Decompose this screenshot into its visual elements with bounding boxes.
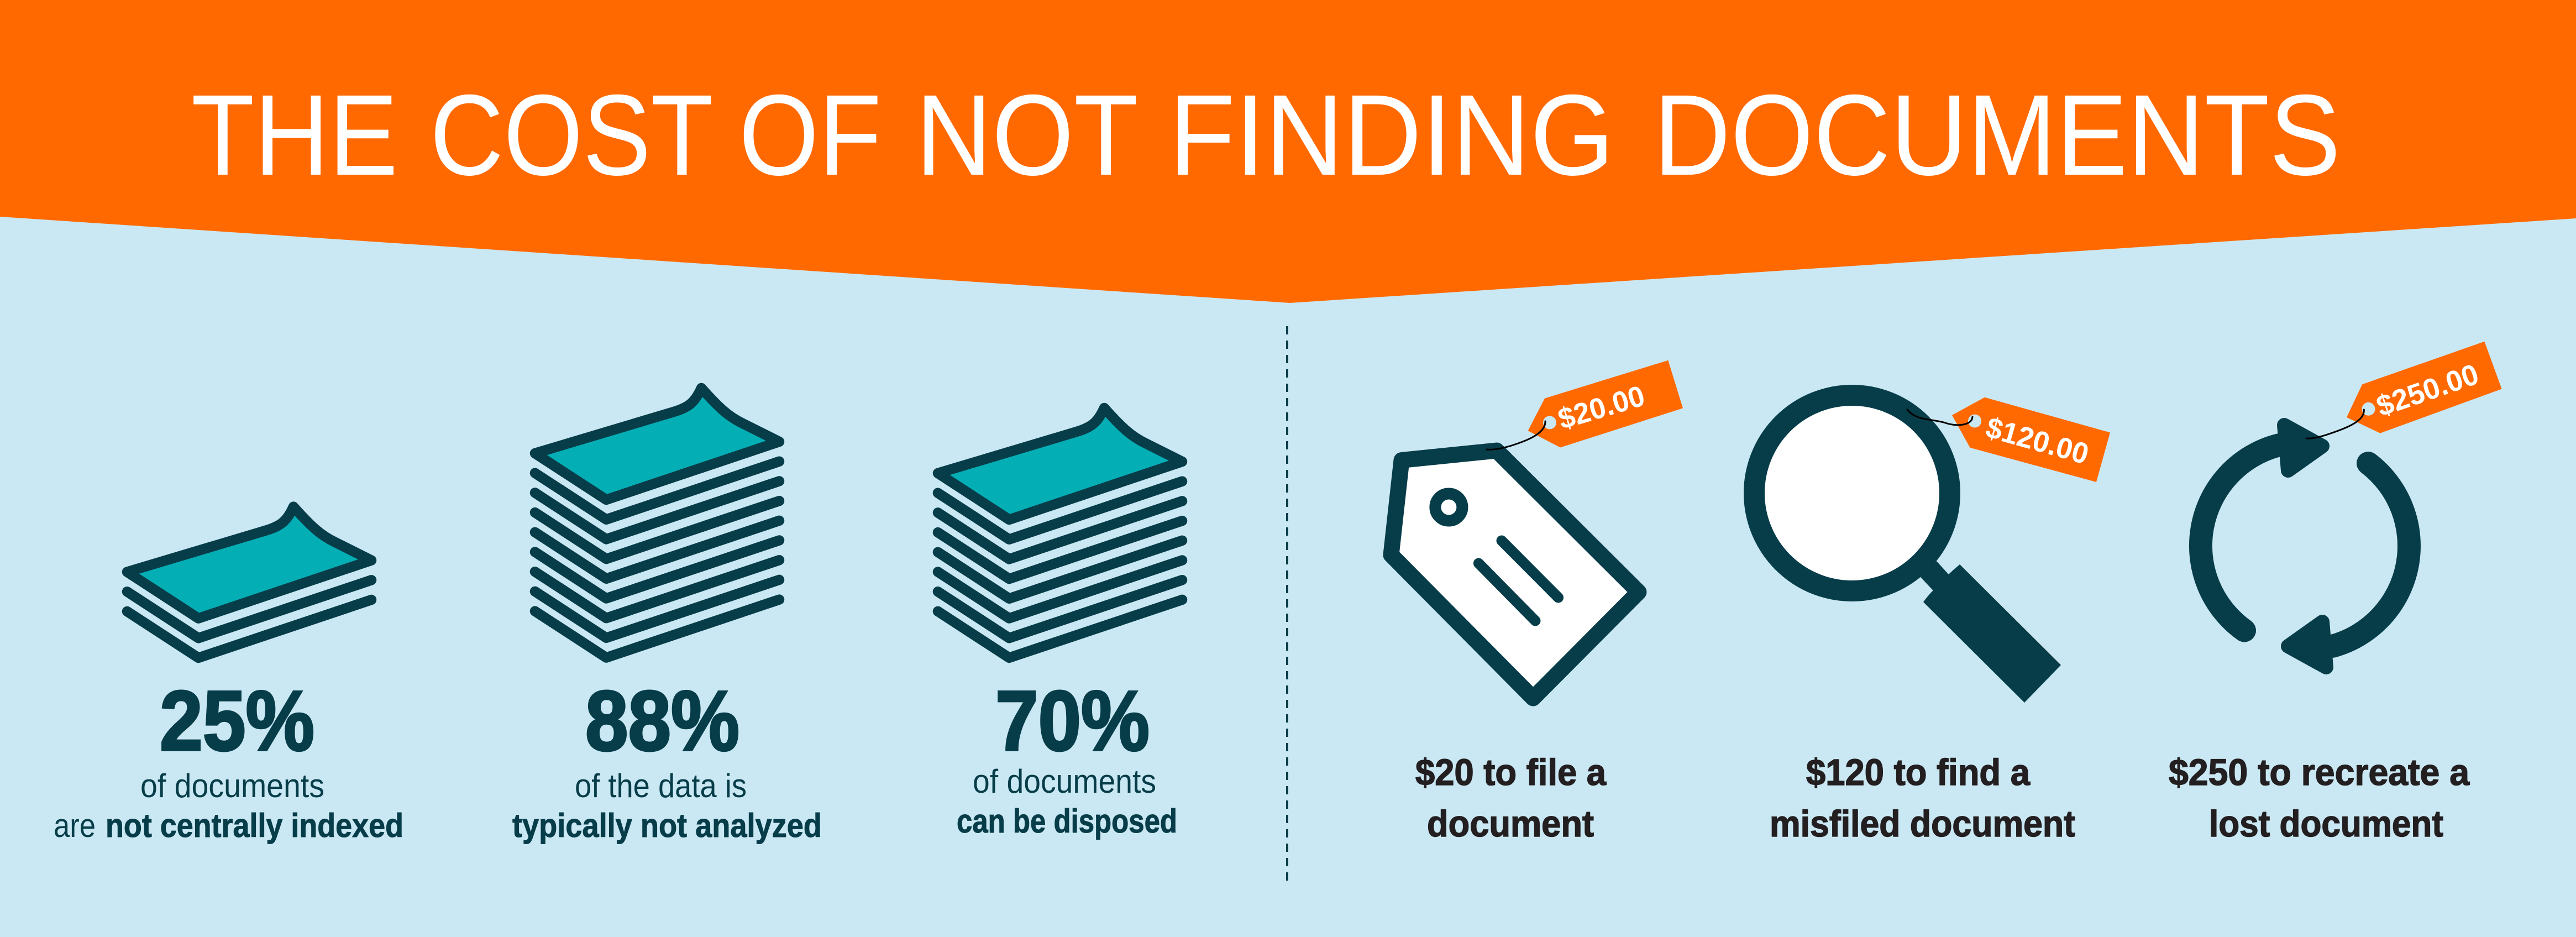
icon: circular arrows [2201, 425, 2409, 667]
panel: 25% not centrally indexed [54, 507, 403, 844]
panel: $120 to find [1754, 395, 2110, 845]
divider: dashed line [1286, 326, 1288, 887]
caption: are not centrally indexed: are [54, 807, 96, 844]
title: OF [739, 71, 882, 200]
price label: $120.00 [1907, 397, 2110, 482]
title: COST [430, 71, 711, 200]
caption: can be disposed: can be disposed [957, 803, 1177, 840]
caption: of documents: of documents [140, 767, 324, 804]
caption: of the data is: of the data is [575, 767, 747, 804]
title: THE [191, 71, 398, 200]
icon: small paper stack [127, 507, 371, 658]
caption: $20 to file a document [1415, 752, 1607, 845]
title: NOT [916, 71, 1136, 200]
caption: $250 to recreate a lost document: lost document [2209, 803, 2443, 845]
stat: 88%: 88% [585, 673, 739, 768]
title: DOCUMENTS [1654, 71, 2341, 200]
icon: large price tag [1391, 451, 1639, 698]
price label: $20.00 [1487, 360, 1683, 449]
stat: 25%: 25% [160, 673, 314, 768]
title: FINDING [1169, 71, 1614, 200]
caption: $20 to file a document: document [1427, 803, 1594, 845]
price label: $20.00: $20.00 [1555, 379, 1649, 436]
panel: $20 to file [1391, 360, 1683, 845]
price label: $250.00: $250.00 [2373, 358, 2483, 423]
stat: 70%: 70% [995, 673, 1150, 768]
caption: $120 to find a misfiled document: $120 to find a [1806, 752, 2031, 793]
icon: magnifying glass [1754, 395, 2061, 703]
panel: 88% not analyzed [512, 388, 822, 844]
icon: tall paper stack [535, 388, 779, 658]
panel: 70% can be disposed [938, 408, 1182, 840]
caption: $250 to recreate a lost document: $250 to recreate a [2169, 752, 2470, 793]
caption: typically not analyzed: typically not analyzed [512, 807, 822, 844]
caption: are not centrally indexed: not centrally indexed [106, 807, 403, 844]
header banner [0, 0, 2576, 303]
panel: $250 to recreate [2169, 342, 2502, 845]
caption: $120 to find a misfiled document [1770, 752, 2075, 845]
caption: of documents: of documents [973, 763, 1156, 800]
caption: $120 to find a misfiled document: misfiled document [1770, 803, 2075, 845]
price label: $250.00 [2306, 342, 2502, 438]
caption: $20 to file a document: $20 to file a [1415, 752, 1607, 793]
icon: medium paper stack [938, 408, 1182, 658]
price label: $120.00: $120.00 [1982, 411, 2092, 471]
caption: $250 to recreate a lost document [2169, 752, 2470, 845]
